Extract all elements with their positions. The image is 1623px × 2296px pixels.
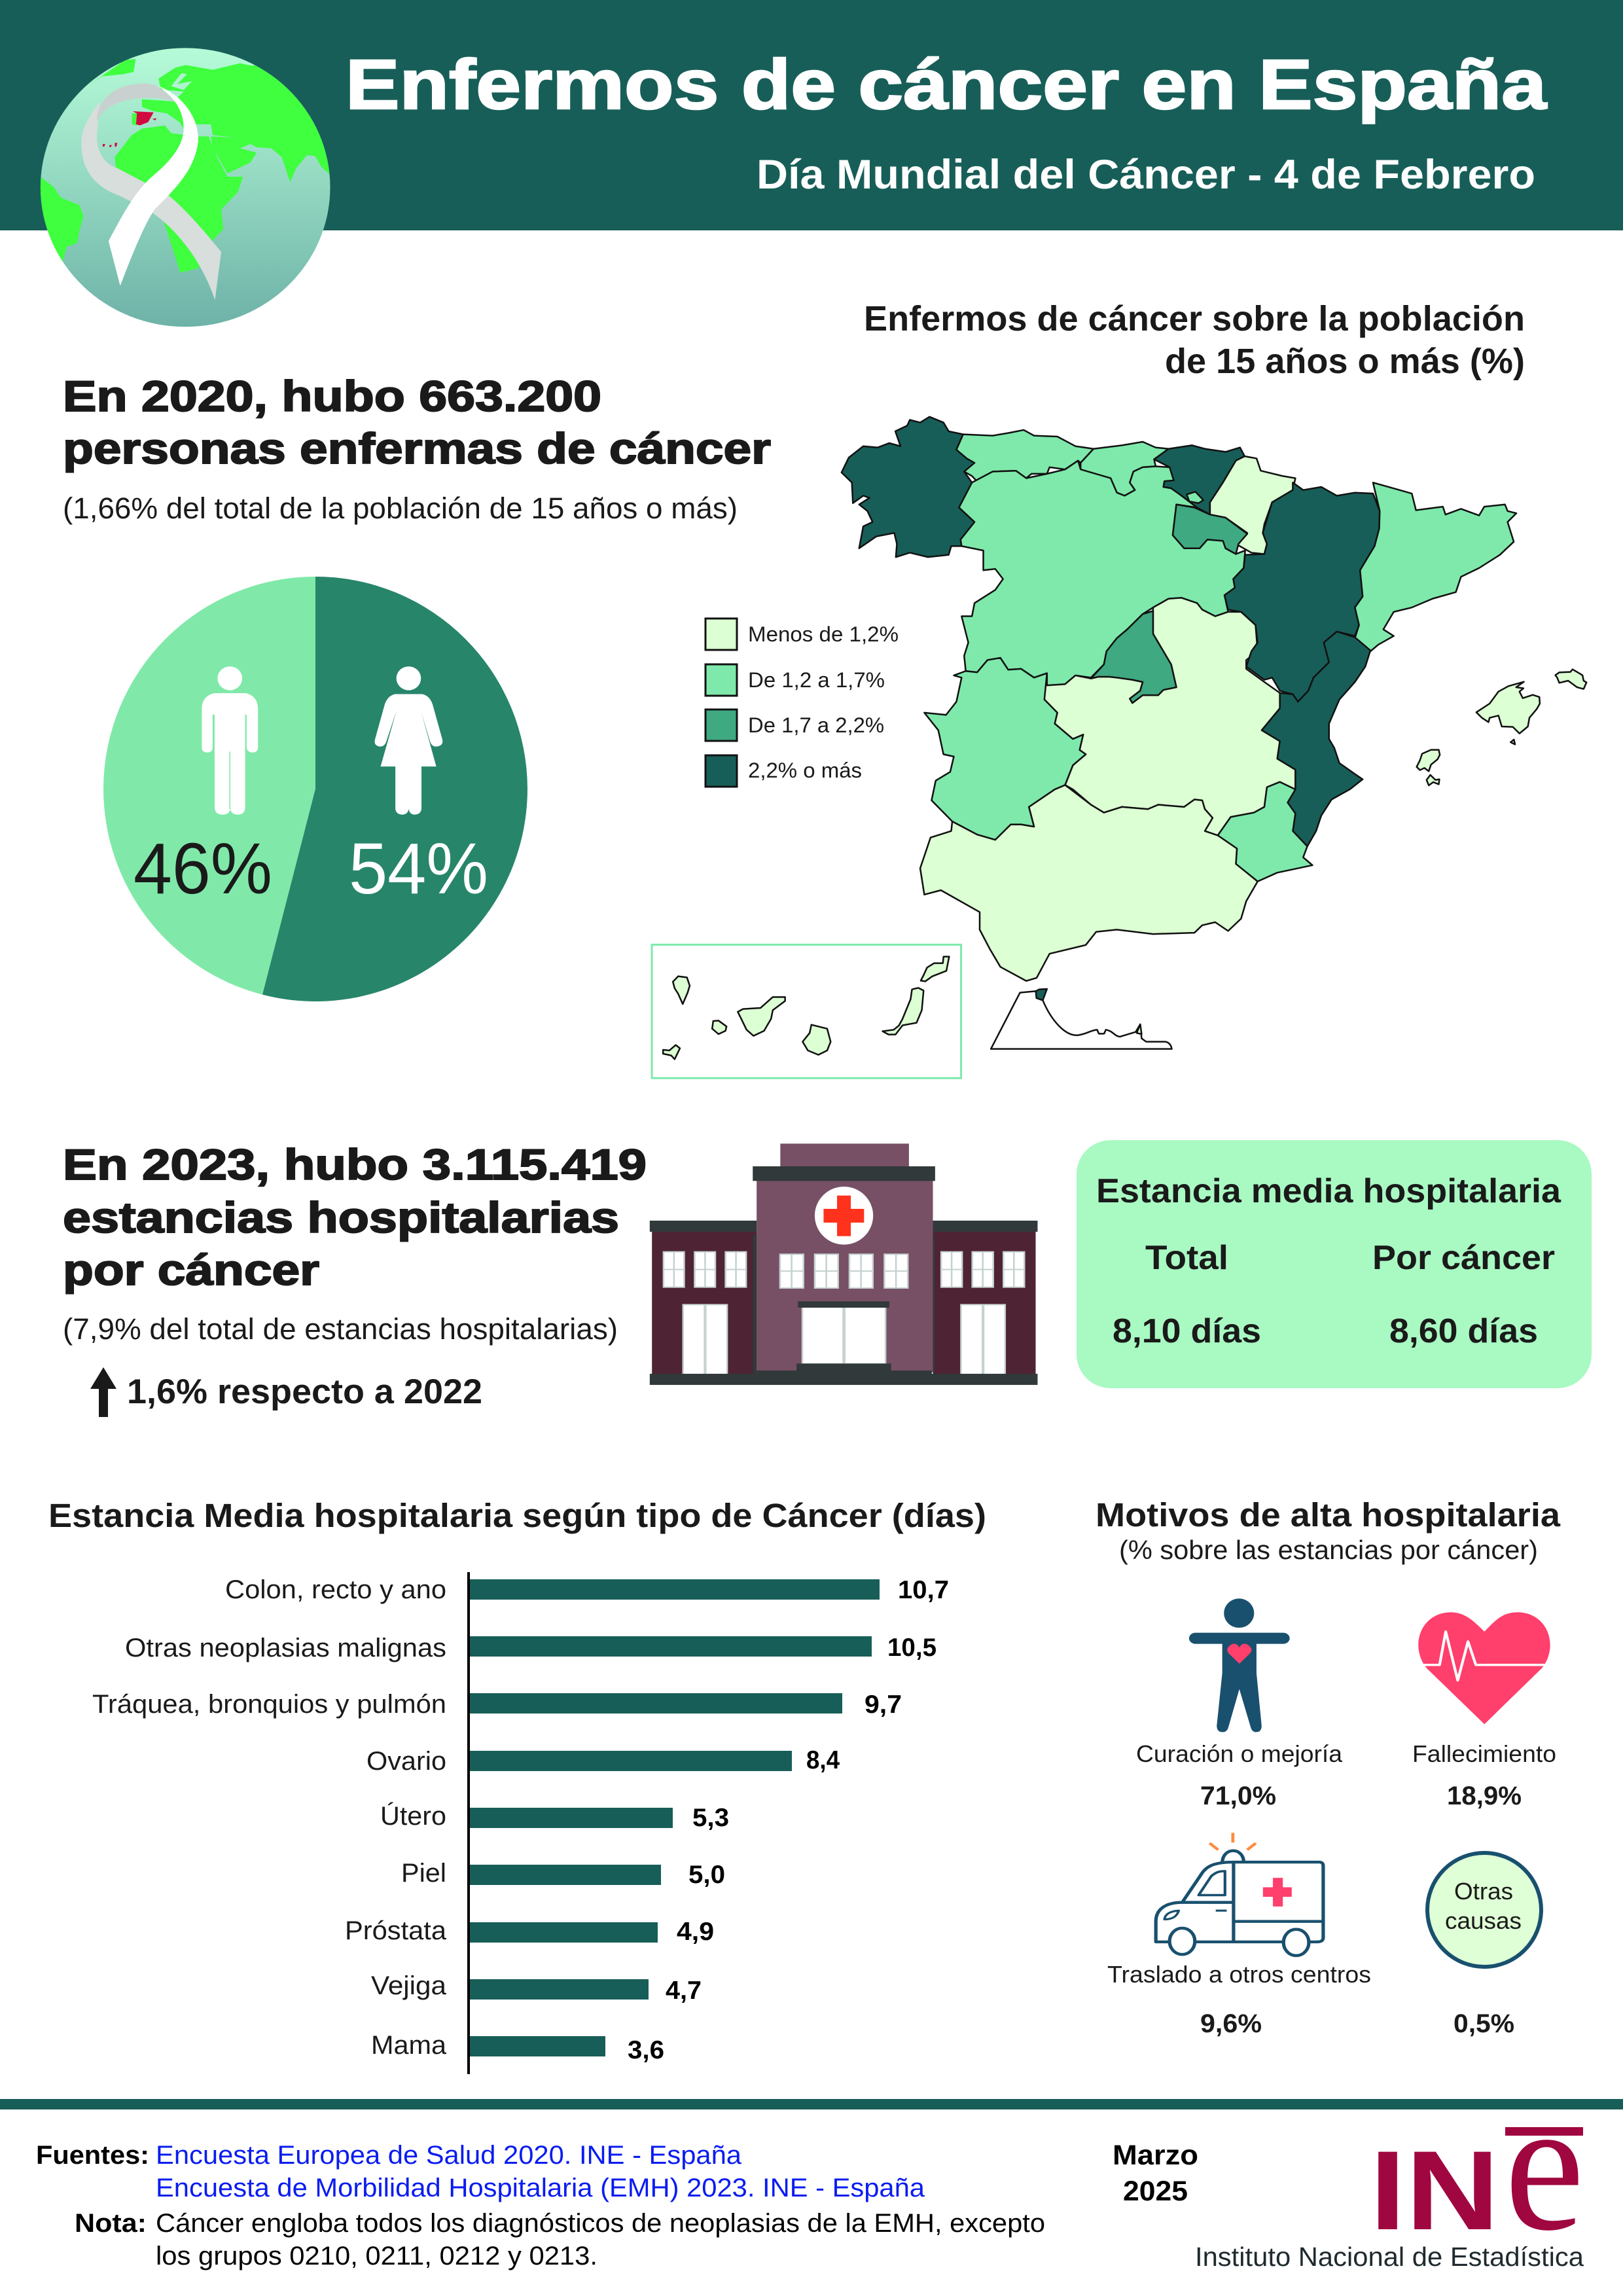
icon: hospital — [650, 1143, 1037, 1385]
category labels: Colon, recto y ano — [225, 1575, 446, 1604]
bar chart heading: Estancia Media hospitalaria según tipo de Cáncer (días) — [48, 1497, 986, 1534]
region: La Rioja — [1173, 505, 1247, 554]
source links — [156, 2141, 925, 2202]
value: other causes: 0,5% — [1454, 2009, 1514, 2038]
value labels: 8,4 — [806, 1746, 840, 1774]
heading: 2020 patients: En 2020, hubo 663.200 — [63, 372, 601, 420]
region: Murcia — [1218, 782, 1312, 882]
note text: Cáncer engloba todos los diagnósticos de neoplasias de la EMH, excepto — [156, 2209, 1045, 2238]
region: Asturias — [956, 430, 1094, 480]
discharge reasons heading: Motivos de alta hospitalaria — [1096, 1496, 1561, 1534]
category labels: Otras neoplasias malignas — [125, 1634, 446, 1662]
sources label: Fuentes: — [36, 2141, 149, 2170]
icon: other causes circle: Otras — [1454, 1878, 1513, 1905]
logo: INE: e — [1505, 2061, 1584, 2270]
value labels: 5,3 — [692, 1804, 729, 1832]
region: Andalucía — [920, 785, 1258, 981]
icon: other causes circle — [1427, 1853, 1541, 1967]
region: Castilla-La Mancha — [1044, 598, 1295, 835]
date: Marzo — [1113, 2140, 1198, 2171]
map: Balearic Islands — [1417, 670, 1586, 785]
map title — [864, 299, 1525, 381]
footer band — [0, 2099, 1623, 2109]
value labels: 4,9 — [677, 1918, 714, 1946]
map legend: Menos de 1,2% — [748, 622, 899, 646]
value labels: 9,7 — [865, 1691, 902, 1719]
heading: 2020 patients: personas enfermas de cáncer — [63, 424, 771, 473]
heading: 2023 stays: En 2023, hubo 3.115.419 — [63, 1140, 647, 1189]
icon: globe with ribbon — [41, 48, 330, 327]
region: Comunidad Valenciana — [1262, 632, 1370, 846]
heading: 2020 patients — [63, 372, 771, 473]
logo: INE: IN — [1370, 2128, 1499, 2253]
icon: up arrow — [90, 1367, 116, 1417]
icon: heart with ECG — [1418, 1612, 1550, 1724]
text: change on 2022: 1,6% respecto a 2022 — [127, 1372, 482, 1411]
region: Cataluña — [1355, 482, 1516, 651]
title: Enfermos de cáncer en España — [346, 45, 1547, 124]
note text: los grupos 0210, 0211, 0212 y 0213. — [156, 2242, 597, 2270]
value labels: 10,5 — [887, 1634, 936, 1662]
source links: Encuesta Europea de Salud 2020. INE - España — [156, 2141, 742, 2170]
category labels: Ovario — [366, 1747, 446, 1776]
date — [1113, 2140, 1198, 2207]
subtitle: Día Mundial del Cáncer - 4 de Febrero — [757, 152, 1535, 198]
category labels: Próstata — [345, 1916, 447, 1945]
category labels: Tráquea, bronquios y pulmón — [92, 1690, 446, 1719]
value: cancer days: 8,60 días — [1389, 1312, 1538, 1350]
label: recovery: Curación o mejoría — [1136, 1740, 1343, 1767]
value: recovery: 71,0% — [1200, 1782, 1276, 1810]
pie chart: sex split — [103, 577, 527, 1001]
source links: Encuesta de Morbilidad Hospitalaria (EMH) 2023. INE - España — [156, 2174, 925, 2202]
icon: person with heart — [1189, 1598, 1290, 1732]
panel: average stay card — [1077, 1140, 1592, 1388]
bars — [470, 1579, 880, 2056]
value labels: 5,0 — [688, 1861, 725, 1889]
category labels — [92, 1575, 447, 2060]
label: death: Fallecimiento — [1412, 1740, 1556, 1767]
region: Treviño enclave — [1186, 492, 1204, 503]
date: 2025 — [1123, 2176, 1188, 2207]
map: Ceuta and Melilla inset — [991, 989, 1172, 1049]
map legend: De 1,7 a 2,2% — [748, 713, 884, 737]
map legend: De 1,2 a 1,7% — [748, 668, 885, 692]
icon: ambulance — [1156, 1833, 1323, 1956]
pie slice: women 54% — [262, 577, 527, 1001]
icon: other causes circle: causas — [1445, 1907, 1522, 1934]
logo: INE: Instituto Nacional de Estadística — [1195, 2242, 1584, 2272]
label: transfer: Traslado a otros centros — [1107, 1961, 1371, 1988]
map legend: 2,2% o más — [748, 759, 862, 782]
region: País Vasco — [1154, 445, 1245, 514]
map title: de 15 años o más (%) — [1165, 342, 1525, 381]
value labels: 10,7 — [898, 1576, 949, 1604]
discharge reasons heading: (% sobre las estancias por cáncer) — [1119, 1535, 1538, 1565]
note text — [156, 2209, 1045, 2270]
heading: 2023 stays: por cáncer — [63, 1246, 319, 1294]
column label: cancer: Por cáncer — [1372, 1239, 1555, 1277]
logo: INE — [1195, 2061, 1584, 2272]
category labels: Mama — [371, 2031, 447, 2060]
pie slice: men 46% — [103, 577, 315, 995]
value: transfer: 9,6% — [1200, 2009, 1262, 2038]
text: share of stays: (7,9% del total de estancias hospitalarias) — [63, 1312, 618, 1346]
text: share of population: (1,66% del total de la población de 15 años o más) — [63, 492, 738, 525]
card heading: Estancia media hospitalaria — [1096, 1172, 1561, 1210]
discharge reasons heading — [1096, 1496, 1561, 1565]
category labels: Piel — [401, 1859, 446, 1888]
region: Aragón — [1224, 482, 1380, 702]
heading: 2023 stays: estancias hospitalarias — [63, 1193, 619, 1242]
value: women: 54% — [349, 829, 488, 909]
value: death: 18,9% — [1447, 1782, 1522, 1810]
region: Extremadura — [924, 658, 1086, 840]
bar chart: average stay by cancer type — [92, 1572, 949, 2074]
region: Cantabria — [1080, 442, 1169, 495]
map: Canary Islands inset — [652, 944, 961, 1078]
footer: sources and note — [36, 2141, 1045, 2270]
map title: Enfermos de cáncer sobre la población — [864, 299, 1525, 338]
note label: Nota: — [75, 2209, 147, 2238]
category labels: Vejiga — [371, 1971, 447, 2000]
value: total days: 8,10 días — [1113, 1312, 1261, 1350]
icon: woman — [375, 666, 442, 815]
region: Madrid — [1091, 611, 1177, 703]
region: Galicia — [842, 417, 974, 557]
heading: 2023 stays — [63, 1140, 647, 1294]
icon: man — [202, 666, 258, 815]
region: Navarra — [1210, 456, 1295, 554]
value labels: 4,7 — [666, 1977, 702, 2005]
choropleth map: Spain mainland — [842, 417, 1516, 981]
column label: total: Total — [1145, 1239, 1228, 1277]
value labels: 3,6 — [628, 2036, 664, 2064]
header band — [0, 0, 1623, 230]
value: men: 46% — [134, 829, 272, 909]
value labels — [628, 1576, 949, 2064]
region: Castilla y León — [959, 461, 1245, 685]
category labels: Útero — [380, 1801, 446, 1831]
map legend — [705, 619, 899, 787]
